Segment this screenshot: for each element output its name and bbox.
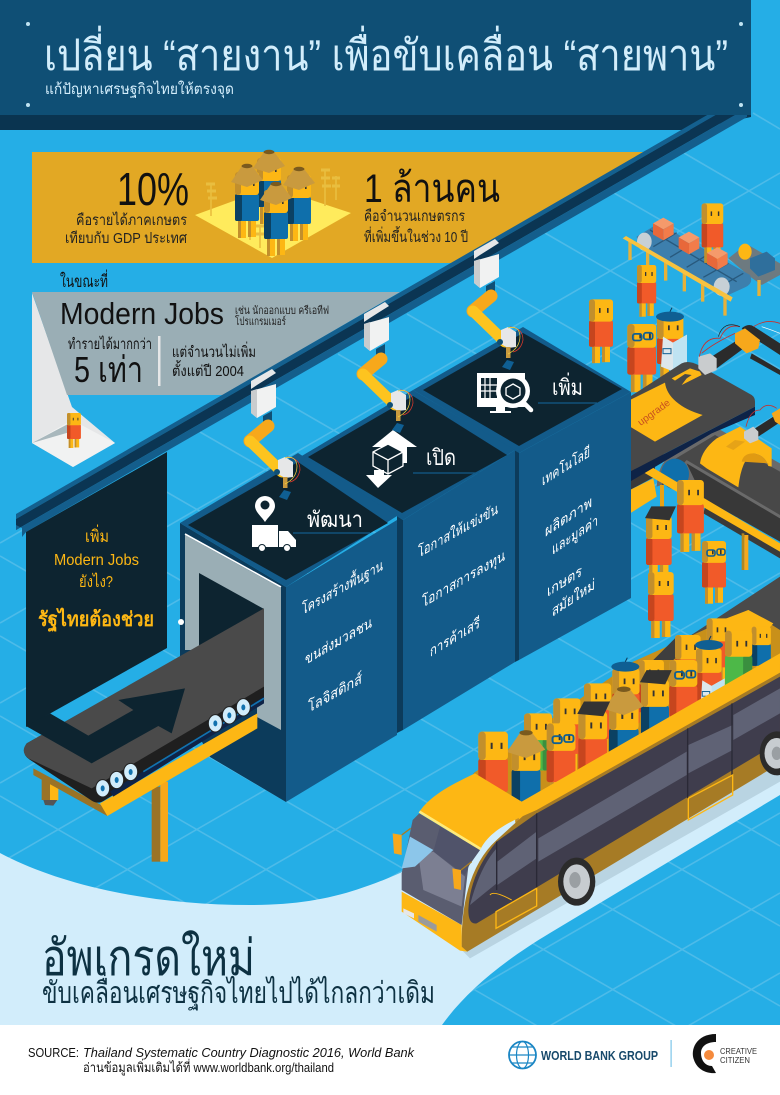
world bank logo: WORLD BANK GROUP xyxy=(541,1049,658,1063)
main conveyor belt xyxy=(24,608,264,862)
bus side windows xyxy=(468,677,780,928)
heading: open: เปิด xyxy=(426,445,456,470)
workers heading to bus xyxy=(645,480,726,638)
gripper two xyxy=(726,405,780,450)
yellow scanner xyxy=(700,427,772,487)
10% stat: 10% xyxy=(117,163,189,215)
header panel xyxy=(0,0,751,115)
overhead rail xyxy=(16,92,747,537)
heading: develop: พัฒนา xyxy=(307,507,363,532)
door frame xyxy=(185,534,281,730)
modern jobs grey panel: แต่จำนวนไม่เพิ่ม xyxy=(172,341,256,361)
bus front xyxy=(393,813,480,952)
while label: ในขณะที่ xyxy=(60,269,108,291)
modern jobs grey panel: เช่น นักออกแบบ ครีเอทีฟ xyxy=(235,304,329,317)
10% stat: คือรายได้ภาคเกษตร xyxy=(76,211,187,229)
world bank logo xyxy=(509,1042,658,1068)
list: open xyxy=(418,499,505,661)
gold statistics panel xyxy=(32,150,645,263)
list: develop xyxy=(302,554,383,717)
creative citizen logo: CITIZEN xyxy=(720,1055,750,1065)
1 million stat: 1 ล้านคน xyxy=(364,167,500,211)
box one: develop xyxy=(180,453,397,802)
dark band under header xyxy=(0,113,751,130)
rollers xyxy=(96,699,250,797)
creative citizen logo: CREATIVE xyxy=(720,1046,757,1056)
icon: pin and truck xyxy=(252,496,296,552)
closing headline: อัพเกรดใหม่ xyxy=(42,930,255,986)
list: increase: สมัยใหม่ xyxy=(552,575,595,621)
call to action sign xyxy=(26,452,167,727)
box two: open xyxy=(300,390,515,733)
gripper one xyxy=(672,321,780,385)
upgrade ramp xyxy=(630,383,703,442)
second conveyor and frame xyxy=(630,427,780,570)
list: increase: ผลิตภาพ xyxy=(545,492,592,541)
spotlight with worker xyxy=(32,293,115,467)
1 million stat: ที่เพิ่มขึ้นในช่วง 10 ปี xyxy=(364,226,468,246)
subtitle: แก้ปัญหาเศรษฐกิจไทยให้ตรงจุด xyxy=(45,80,234,99)
robot arm three xyxy=(473,239,523,370)
source: Thailand Systematic Country Diagnostic 2016, World Bank xyxy=(83,1045,415,1060)
10% stat xyxy=(65,163,189,247)
icon: monitor and magnifier xyxy=(477,373,531,413)
belt arrow xyxy=(26,688,185,763)
light road and ground area xyxy=(0,660,780,1025)
upgrade ramp: upgrade xyxy=(636,397,673,428)
list: open: การค้าเสรี xyxy=(430,614,480,661)
modern jobs grey panel: ตั้งแต่ปี 2004 xyxy=(172,360,244,380)
footer xyxy=(0,1025,780,1095)
modern jobs grey panel xyxy=(32,292,400,395)
bus with passengers xyxy=(393,577,780,958)
1 million stat: คือจำนวนเกษตรกร xyxy=(364,208,465,225)
list: open: โอกาสให้แข่งขัน xyxy=(418,499,498,562)
bus shadow xyxy=(462,763,780,958)
modern jobs grey panel: Modern Jobs xyxy=(60,296,224,331)
bus wheels xyxy=(558,731,780,906)
upgrade conveyor xyxy=(630,321,780,482)
call to action sign: ยังไง? xyxy=(79,572,113,591)
bus interior xyxy=(473,577,780,802)
robot arm one xyxy=(250,369,300,500)
closing headline xyxy=(42,930,435,1011)
1 million stat xyxy=(364,167,500,246)
list: develop: โลจิสติกส์ xyxy=(308,669,362,717)
bus body xyxy=(462,663,780,952)
source: SOURCE: xyxy=(28,1045,79,1060)
icon: arrows and box xyxy=(366,430,417,488)
conveyor belt surface xyxy=(657,429,780,542)
list: increase: และมูลค่า xyxy=(552,511,598,560)
list: develop: ขนส่งมวลชน xyxy=(305,614,372,669)
10% stat: เทียบกับ GDP ประเทศ xyxy=(65,230,187,247)
list: open: โอกาสการลงทุน xyxy=(422,546,505,613)
standing workers xyxy=(589,265,687,392)
gold frame xyxy=(630,450,780,570)
box three: increase xyxy=(413,327,631,662)
belt surface xyxy=(24,608,264,803)
factory line top right xyxy=(589,203,780,392)
modern jobs grey panel: โปรแกรมเมอร์ xyxy=(235,314,286,328)
farmers illustration xyxy=(195,150,351,258)
conveyor legs xyxy=(42,778,168,862)
modern jobs grey panel: 5 เท่า xyxy=(74,349,143,390)
robot arm two xyxy=(363,302,413,433)
source: อ่านข้อมูลเพิ่มเติมได้ที่ www.worldbank.org/thailand xyxy=(83,1059,334,1076)
passengers xyxy=(478,618,771,823)
list: develop: โครงสร้างพื้นฐาน xyxy=(302,554,383,619)
creative citizen logo xyxy=(693,1034,757,1073)
source xyxy=(28,1045,415,1076)
list: increase xyxy=(542,443,598,621)
parts conveyor xyxy=(623,203,780,316)
list: increase: เทคโนโลยี xyxy=(542,443,590,490)
list: increase: เกษตร xyxy=(547,562,582,601)
call to action sign: เพิ่ม xyxy=(85,524,109,546)
closing headline: ขับเคลื่อนเศรษฐกิจไทยไปได้ไกลกว่าเดิม xyxy=(42,972,435,1011)
modern jobs grey panel: ทำรายได้มากกว่า xyxy=(68,335,152,353)
bus roof xyxy=(419,653,780,849)
call to action sign: รัฐไทยต้องช่วย xyxy=(38,607,154,633)
call to action sign: Modern Jobs xyxy=(54,552,139,569)
heading: increase: เพิ่ม xyxy=(552,372,583,400)
